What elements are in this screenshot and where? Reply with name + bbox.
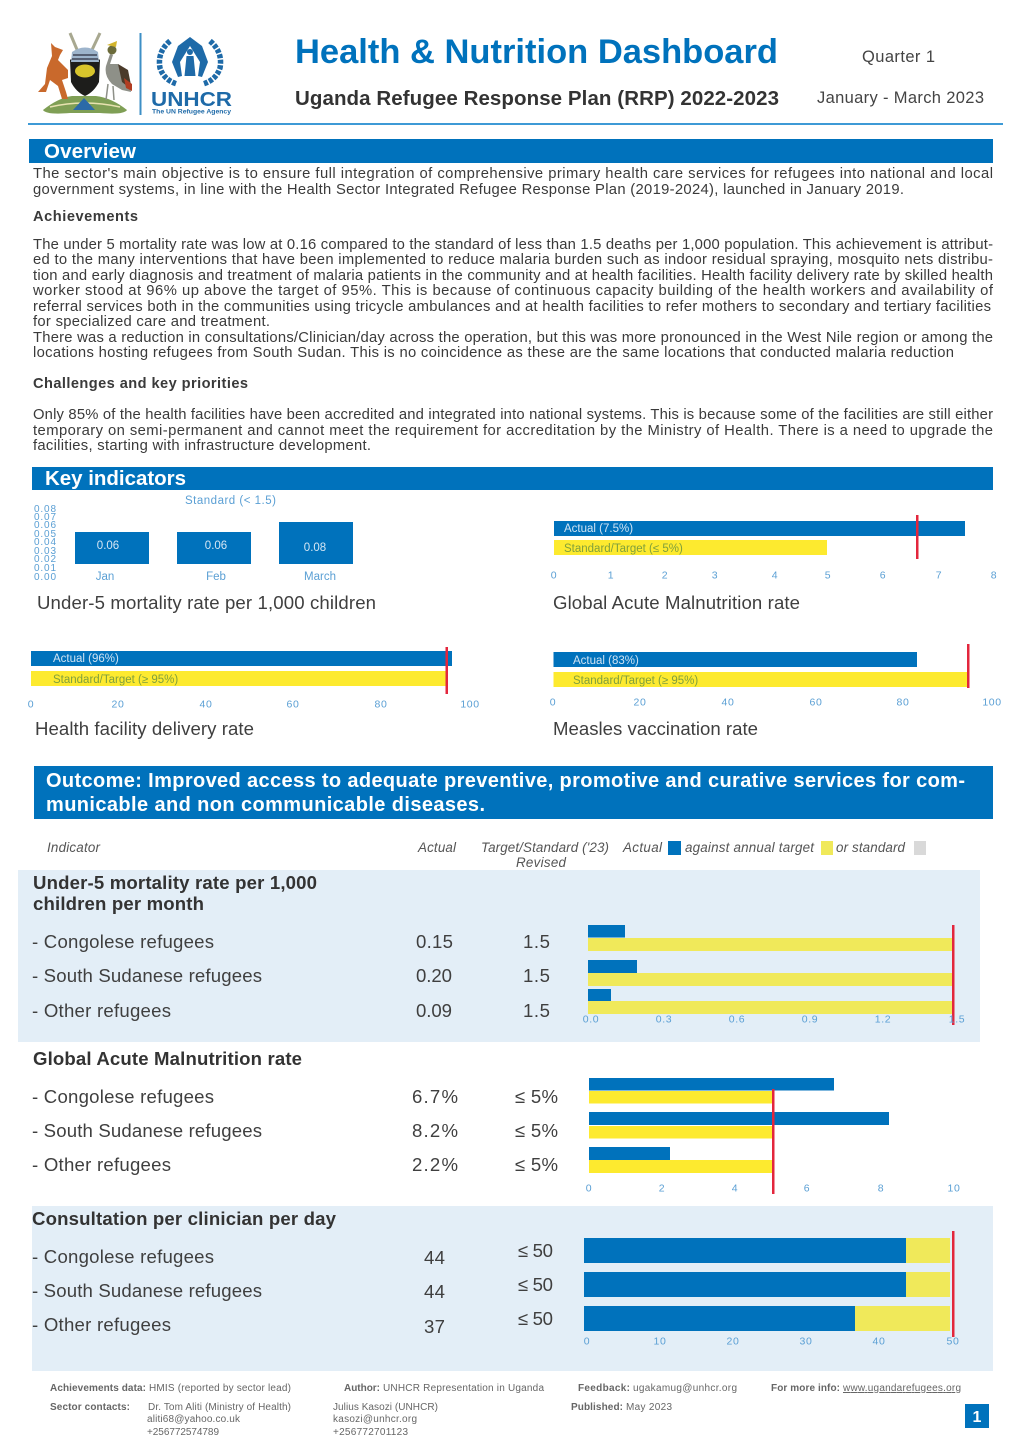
- chart: global acute malnutrition by group: 2: [659, 1182, 665, 1194]
- chart: health facility delivery: Standard/Target (≥ 95%): [53, 674, 178, 686]
- rows: global acute malnutrition: 6.7%: [412, 1086, 458, 1107]
- footer credits: Dr. Tom Aliti (Ministry of Health): [148, 1402, 291, 1413]
- chart: measles vaccination: 60: [810, 696, 822, 708]
- achievements text: There was a reduction in consultations/Clinician/day across the operation, but this was more pronounced in the West Nile region or among the: [33, 330, 993, 346]
- chart: under-5 mortality by group: 0.3: [656, 1014, 672, 1026]
- chart: health facility delivery: 60: [287, 698, 299, 710]
- rows: global acute malnutrition: ≤ 5%: [515, 1154, 558, 1175]
- rows: under-5 mortality: - South Sudanese refugees: [32, 965, 262, 986]
- challenges text: temporary on semi-permanent and cannot meet the requirement for accreditation by the Ministry of Health. There is a need to upgrade the: [33, 423, 993, 439]
- outcome banner: municable and non communicable diseases.: [46, 794, 485, 816]
- chart: measles vaccination: 100: [982, 696, 1002, 708]
- panel: under-5 mortality table: [18, 870, 980, 1042]
- footer credits: [50, 1383, 961, 1438]
- section heading: under-5 mortality: children per month: [33, 893, 204, 914]
- chart: health facility delivery: 20: [112, 698, 124, 710]
- footer credits: Published:: [571, 1402, 623, 1413]
- rows: consultation per clinician: ≤ 50: [518, 1308, 553, 1329]
- section heading: under-5 mortality: [33, 872, 317, 914]
- section heading: under-5 mortality: Under-5 mortality rate per 1,000: [33, 872, 317, 893]
- subtitle: Uganda Refugee Response Plan (RRP) 2022-2023: [295, 87, 779, 110]
- chart: under-5 mortality by group: 1.2: [875, 1014, 891, 1026]
- chart: under-5 mortality monthly columns: [34, 495, 353, 583]
- achievements text: locations hosting refugees from South Sudan. This is no coincidence as these are the same locations that conducted malaria reduction: [33, 345, 954, 361]
- footer credits: aliti68@yahoo.co.uk: [147, 1414, 241, 1425]
- rows: consultation per clinician: - Congolese refugees: [32, 1246, 214, 1267]
- chart: health facility delivery: 40: [200, 698, 212, 710]
- chart: consultation per clinician by group: 10: [654, 1336, 666, 1348]
- chart: under-5 mortality monthly columns: 0.02: [34, 554, 56, 565]
- chart: global acute malnutrition: 5: [825, 570, 831, 582]
- footer credits: UNHCR Representation in Uganda: [383, 1383, 544, 1394]
- footer credits: Feedback:: [578, 1383, 630, 1394]
- footer credits: +256772574789: [147, 1427, 219, 1438]
- logo: Uganda coat of arms: [38, 33, 132, 114]
- achievements text: worker stood at 96% up above the target of 95%. This is because of continuous capacity building of the health workers and availability of: [32, 283, 994, 299]
- rows: under-5 mortality: 1.5: [523, 965, 550, 986]
- table header and legend: Actual: [622, 840, 663, 855]
- chart: global acute malnutrition: 6: [880, 570, 886, 582]
- achievements text: [32, 237, 994, 361]
- chart: under-5 mortality by group: [583, 925, 965, 1026]
- rows: consultation per clinician: 44: [424, 1247, 445, 1268]
- rows: consultation per clinician: - Other refugees: [32, 1314, 171, 1335]
- chart: global acute malnutrition: 3: [712, 570, 718, 582]
- footer credits: For more info:: [771, 1383, 840, 1394]
- chart: consultation per clinician by group: [584, 1231, 959, 1348]
- chart: global acute malnutrition by group: 8: [878, 1182, 884, 1194]
- footer credits: +256772701123: [333, 1427, 408, 1438]
- chart: global acute malnutrition by group: 0: [586, 1182, 592, 1194]
- chart: under-5 mortality monthly columns: 0.08: [304, 542, 326, 554]
- section heading: consultation per clinician: Consultation per clinician per day: [32, 1208, 337, 1229]
- rows: global acute malnutrition: - Other refugees: [32, 1154, 171, 1175]
- achievements text: The under 5 mortality rate was low at 0.16 compared to the standard of less than 1.5 deaths per 1,000 population. This achievement is attribut-: [33, 237, 993, 253]
- chart: measles vaccination: 0: [550, 696, 556, 708]
- challenges heading: Challenges and key priorities: [33, 376, 248, 392]
- chart: global acute malnutrition by group: 6: [804, 1182, 810, 1194]
- overview banner: Overview: [44, 140, 136, 163]
- period label: January - March 2023: [817, 89, 984, 107]
- chart: measles vaccination: Standard/Target (≥ 95%): [573, 675, 698, 687]
- chart: health facility delivery: Actual (96%): [53, 653, 119, 665]
- chart: under-5 mortality monthly columns: 0.06: [205, 540, 227, 552]
- rows: consultation per clinician: [32, 1240, 553, 1337]
- chart: under-5 mortality monthly columns: 0.06: [97, 540, 119, 552]
- chart: under-5 mortality monthly columns: 0.01: [34, 563, 56, 574]
- chart: under-5 mortality monthly columns: Standard (< 1.5): [185, 495, 276, 507]
- achievements text: tion and early diagnosis and treatment of malaria patients in the community and at health facilities. Health facility delivery rate by skilled health: [33, 268, 993, 284]
- rows: under-5 mortality: 1.5: [523, 931, 550, 952]
- challenges text: [33, 407, 993, 454]
- header rule: [28, 123, 1003, 125]
- rows: global acute malnutrition: ≤ 5%: [515, 1086, 558, 1107]
- chart: under-5 mortality by group: 0.9: [802, 1014, 818, 1026]
- chart: under-5 mortality monthly columns: 0.03: [34, 546, 56, 557]
- rows: global acute malnutrition: 8.2%: [412, 1120, 458, 1141]
- rows: consultation per clinician: 37: [424, 1316, 445, 1337]
- rows: consultation per clinician: - South Sudanese refugees: [32, 1280, 262, 1301]
- overview text block: The sector's main objective is to ensure full integration of comprehensive primary health care services for refugees into national and local: [33, 166, 993, 182]
- chart: global acute malnutrition by group: 10: [948, 1182, 960, 1194]
- title: Health & Nutrition Dashboard: [295, 33, 778, 71]
- table header and legend: Target/Standard ('23): [481, 840, 609, 855]
- page number: [965, 1404, 989, 1428]
- key indicators banner: Key indicators: [45, 467, 186, 490]
- rows: consultation per clinician: 44: [424, 1281, 445, 1302]
- achievements text: for specialized care and treatment.: [33, 314, 270, 330]
- chart: under-5 mortality monthly columns: 0.00: [34, 572, 56, 583]
- chart: health facility delivery: 80: [375, 698, 387, 710]
- rows: global acute malnutrition: [32, 1086, 558, 1175]
- logo: UNHCR: The UN Refugee Agency: [152, 108, 231, 116]
- chart: global acute malnutrition: 8: [991, 570, 997, 582]
- chart title: health facility delivery: Health facility delivery rate: [35, 718, 254, 739]
- chart: consultation per clinician by group: 40: [873, 1336, 885, 1348]
- chart: measles vaccination: 40: [722, 696, 734, 708]
- chart: measles vaccination: 20: [634, 696, 646, 708]
- page number: 1: [973, 1409, 982, 1426]
- chart: health facility delivery: [28, 647, 480, 710]
- chart: under-5 mortality by group: 0.6: [729, 1014, 745, 1026]
- table header and legend: [47, 840, 926, 870]
- challenges text: facilities, starting with infrastructure development.: [33, 438, 371, 454]
- chart: under-5 mortality monthly columns: March: [304, 571, 336, 583]
- chart: under-5 mortality monthly columns: 0.07: [34, 512, 56, 523]
- chart: consultation per clinician by group: 0: [584, 1336, 590, 1348]
- chart: consultation per clinician by group: 30: [800, 1336, 812, 1348]
- chart: global acute malnutrition by group: [586, 1078, 960, 1194]
- rows: under-5 mortality: - Congolese refugees: [32, 931, 214, 952]
- chart: global acute malnutrition: 1: [608, 570, 614, 582]
- logo: UNHCR: UNHCR: [151, 89, 233, 111]
- rows: under-5 mortality: 0.15: [416, 931, 453, 952]
- chart: measles vaccination: 80: [897, 696, 909, 708]
- chart: global acute malnutrition: Standard/Target (≤ 5%): [564, 543, 683, 555]
- table header and legend: against annual target: [685, 840, 815, 855]
- overview text block: government systems, in line with the Health Sector Integrated Refugee Response Plan (2019-2024), launched in January 2019.: [33, 182, 904, 198]
- chart: under-5 mortality monthly columns: Jan: [96, 571, 114, 583]
- panel: consultation per clinician table: [32, 1206, 993, 1371]
- chart: under-5 mortality monthly columns: 0.04: [34, 537, 56, 548]
- table header and legend: Indicator: [47, 840, 101, 855]
- rows: global acute malnutrition: 2.2%: [412, 1154, 458, 1175]
- chart title: measles vaccination: Measles vaccination rate: [553, 718, 758, 739]
- rows: under-5 mortality: [32, 931, 550, 1021]
- outcome banner: Outcome: Improved access to adequate preventive, promotive and curative services for com-: [46, 770, 965, 792]
- challenges text: Only 85% of the health facilities have been accredited and integrated into national systems. This is because some of the facilities are still either: [33, 407, 993, 423]
- rows: global acute malnutrition: ≤ 5%: [515, 1120, 558, 1141]
- chart: measles vaccination: Actual (83%): [573, 655, 639, 667]
- chart title: under-5 mortality: Under-5 mortality rate per 1,000 children: [37, 592, 376, 613]
- rows: under-5 mortality: 0.09: [416, 1000, 452, 1021]
- chart: consultation per clinician by group: 20: [727, 1336, 739, 1348]
- chart: under-5 mortality monthly columns: Feb: [206, 571, 226, 583]
- footer credits: Sector contacts:: [50, 1402, 130, 1413]
- chart: under-5 mortality by group: 1.5: [949, 1014, 965, 1026]
- chart: health facility delivery: 100: [460, 698, 480, 710]
- chart: under-5 mortality by group: 0.0: [583, 1014, 599, 1026]
- chart title: global acute malnutrition: Global Acute Malnutrition rate: [553, 592, 800, 613]
- chart: consultation per clinician by group: 50: [947, 1336, 959, 1348]
- rows: global acute malnutrition: - South Sudanese refugees: [32, 1120, 262, 1141]
- logo: UNHCR: [151, 37, 233, 116]
- chart: global acute malnutrition: 7: [936, 570, 942, 582]
- chart: global acute malnutrition: 0: [551, 570, 557, 582]
- footer credits: Author:: [344, 1383, 380, 1394]
- footer credits: HMIS (reported by sector lead): [149, 1383, 291, 1394]
- achievements text: ed to the many interventions that have been implemented to reduce malaria burden such as indoor residual spraying, mosquito nets distribu-: [33, 252, 993, 268]
- footer credits: www.ugandarefugees.org: [842, 1383, 961, 1394]
- footer credits: Achievements data:: [50, 1383, 146, 1394]
- table header and legend: or standard: [836, 840, 906, 855]
- chart: global acute malnutrition by group: 4: [732, 1182, 738, 1194]
- chart: under-5 mortality monthly columns: 0.06: [34, 520, 56, 531]
- overview banner: [29, 139, 993, 163]
- table header and legend: Actual: [417, 840, 457, 855]
- key indicators banner: [32, 467, 993, 490]
- footer credits: May 2023: [626, 1402, 672, 1413]
- chart: global acute malnutrition: Actual (7.5%): [564, 523, 633, 535]
- section heading: global acute malnutrition: Global Acute Malnutrition rate: [33, 1048, 302, 1069]
- table header and legend: Revised: [516, 855, 567, 870]
- rows: under-5 mortality: 1.5: [523, 1000, 550, 1021]
- overview text block: [33, 166, 993, 198]
- chart: measles vaccination: [550, 644, 1002, 708]
- footer credits: Julius Kasozi (UNHCR): [333, 1402, 438, 1413]
- rows: under-5 mortality: 0.20: [416, 965, 452, 986]
- rows: global acute malnutrition: - Congolese refugees: [32, 1086, 214, 1107]
- chart: global acute malnutrition: 2: [662, 570, 668, 582]
- logo divider: [140, 33, 142, 115]
- chart: global acute malnutrition: [551, 515, 997, 582]
- chart: under-5 mortality monthly columns: 0.08: [34, 504, 56, 515]
- outcome banner: [34, 766, 993, 819]
- chart: health facility delivery: 0: [28, 698, 34, 710]
- footer credits: kasozi@unhcr.org: [333, 1414, 417, 1425]
- rows: under-5 mortality: - Other refugees: [32, 1000, 171, 1021]
- achievements text: referral services both in the communities using tricycle ambulances and at health facilities to refer mothers to secondary and tertiary facilities: [33, 299, 991, 315]
- rows: consultation per clinician: ≤ 50: [518, 1240, 553, 1261]
- footer credits: ugakamug@unhcr.org: [633, 1383, 737, 1394]
- rows: consultation per clinician: ≤ 50: [518, 1274, 553, 1295]
- achievements heading: Achievements: [33, 209, 138, 225]
- chart: global acute malnutrition: 4: [772, 570, 778, 582]
- chart: under-5 mortality monthly columns: 0.05: [34, 529, 56, 540]
- quarter label: Quarter 1: [862, 48, 935, 66]
